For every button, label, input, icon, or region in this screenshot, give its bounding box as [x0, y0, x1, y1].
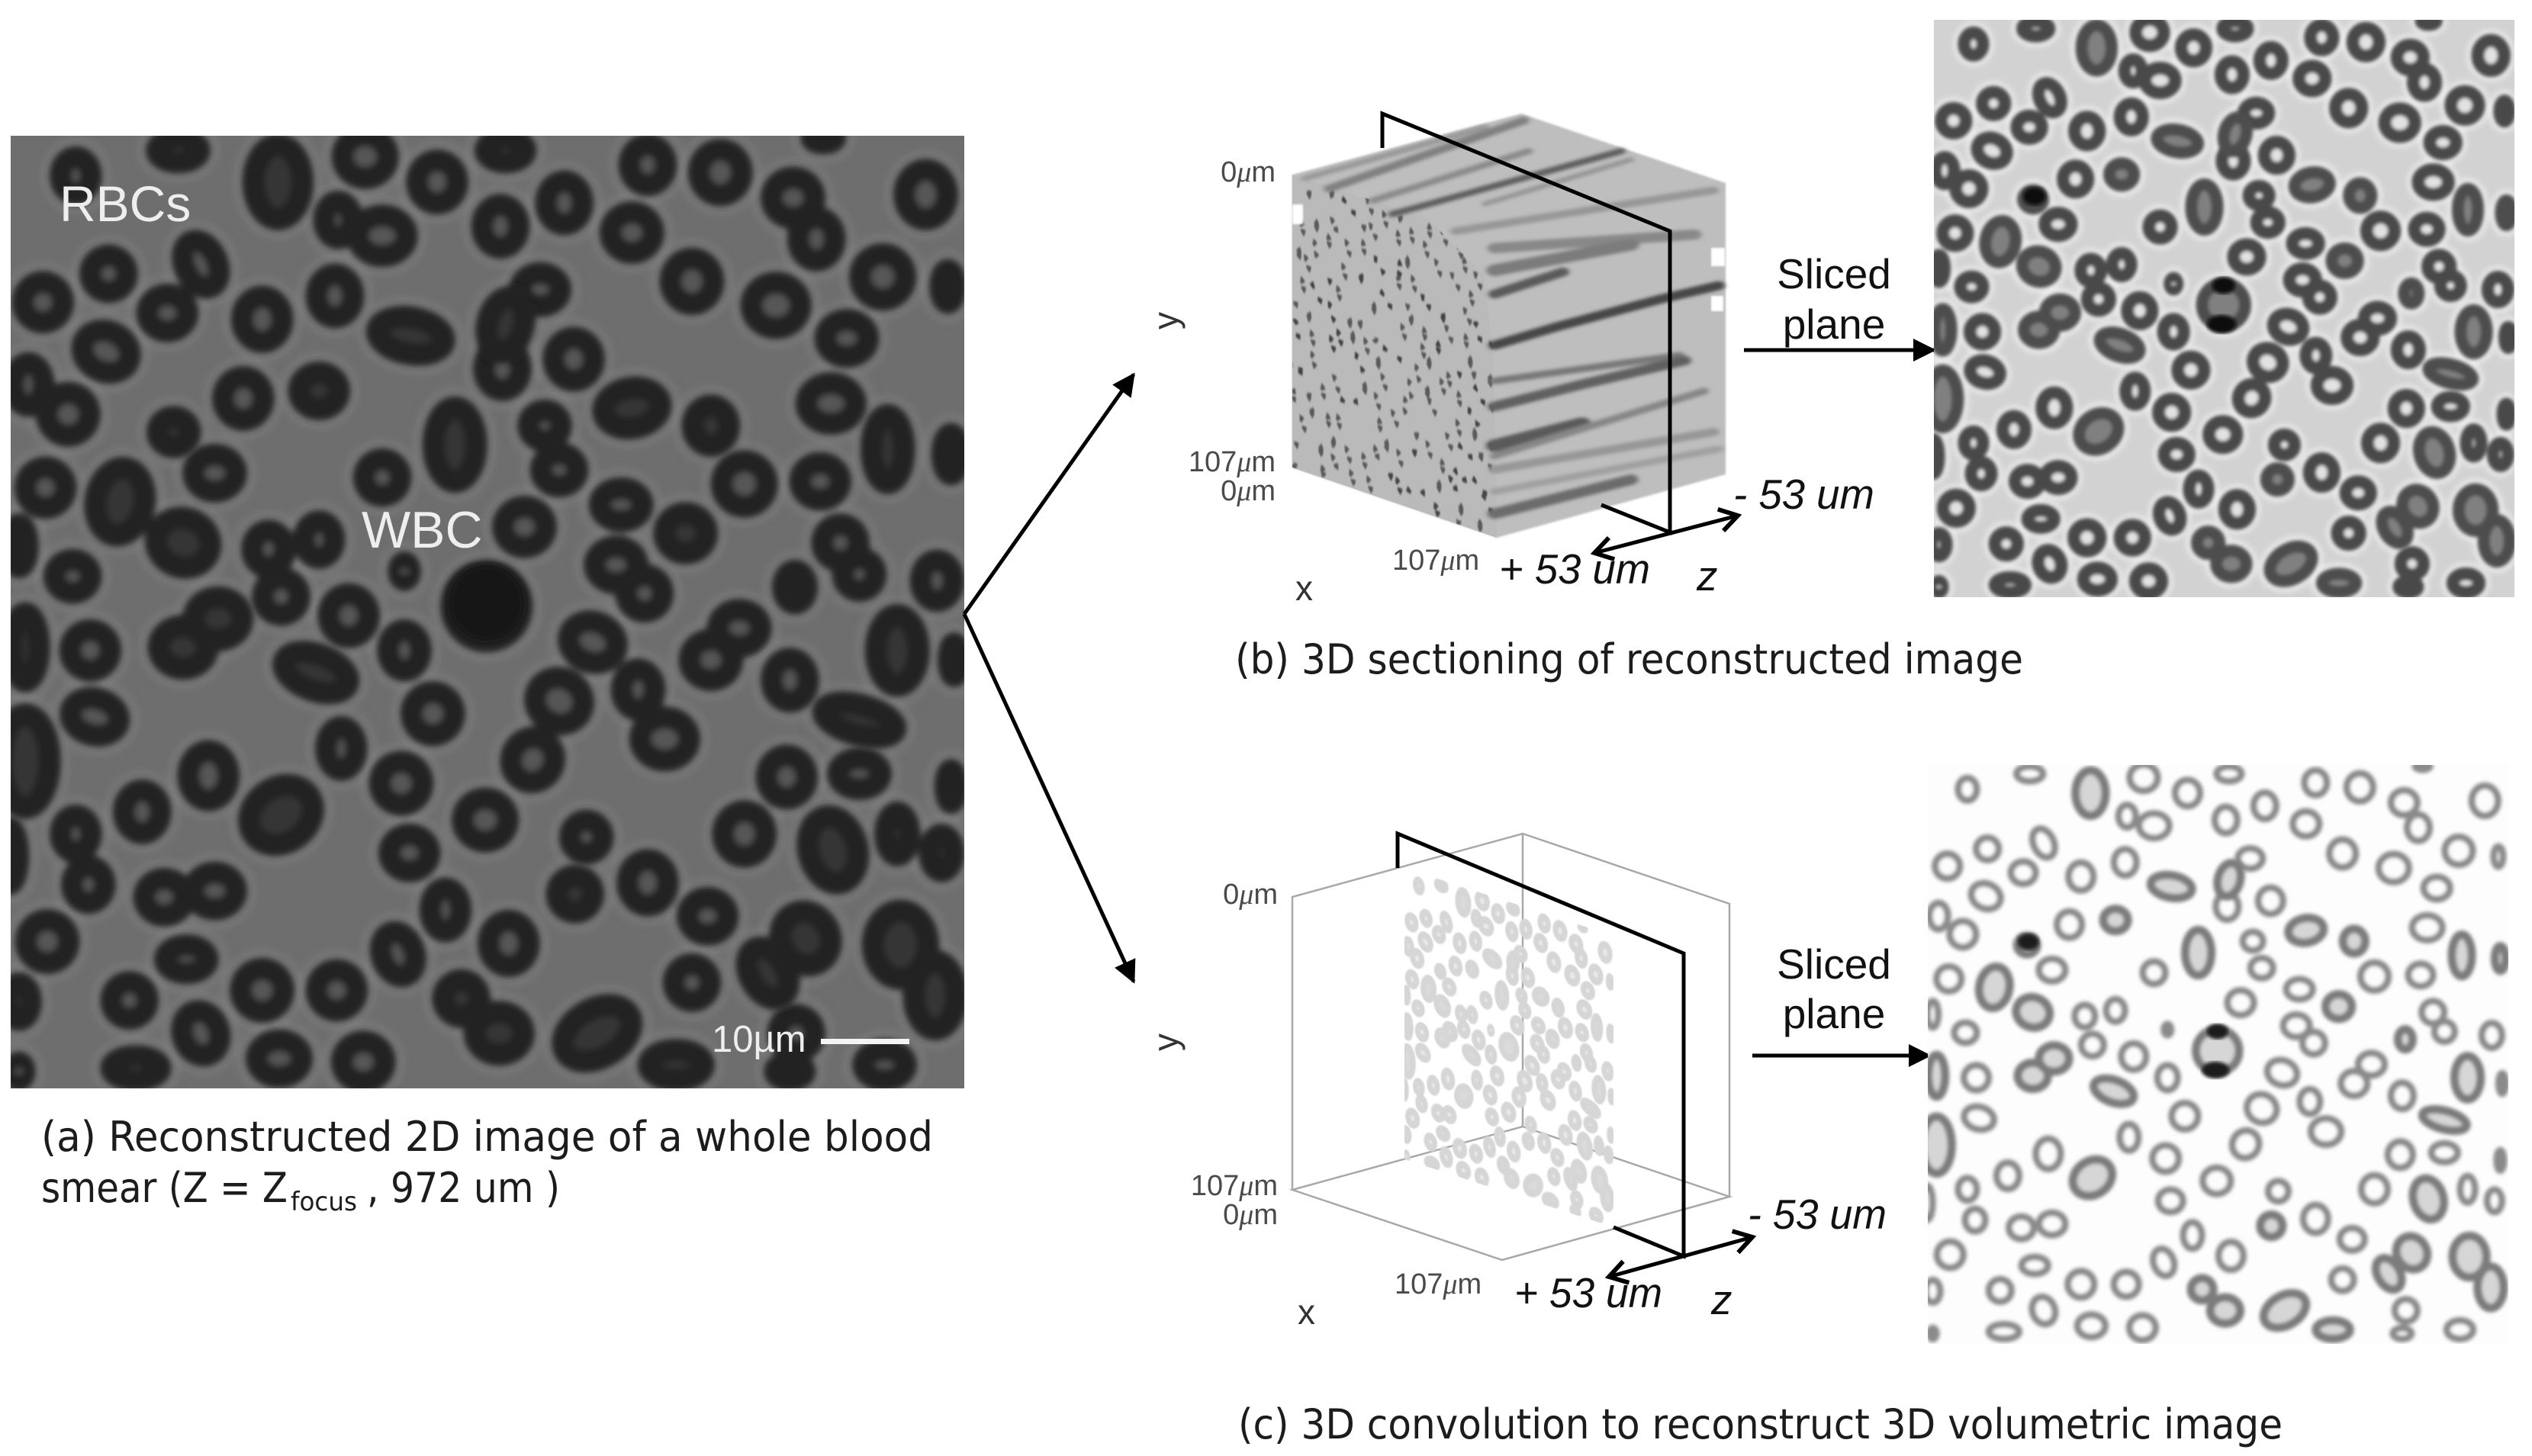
- sliced plane label c: Sliced: [1777, 940, 1891, 988]
- sliced plane label c: [1777, 940, 1891, 1037]
- distance labels: - 53 um: [1748, 1191, 1887, 1238]
- slicing plane outline: [1382, 114, 1670, 532]
- axis labels: 0μm: [1221, 156, 1276, 188]
- arrow: to panel c: [964, 614, 1134, 982]
- panel c: 3D volumetric cube: [1146, 834, 1887, 1332]
- label: RBCs: RBCs: [60, 175, 191, 232]
- axis labels: 107μm: [1395, 1268, 1482, 1300]
- caption a: smear (Z = Z: [41, 1164, 288, 1212]
- scale bar: [821, 1039, 909, 1044]
- image: sliced plane c: [1928, 765, 2508, 1344]
- panel a: reconstructed 2D image of blood smear: [1, 132, 964, 1088]
- distance labels: z: [1710, 1276, 1732, 1323]
- scale bar label: 10µm: [712, 1019, 806, 1060]
- caption a: focus: [291, 1187, 357, 1217]
- distance labels: + 53 um: [1499, 545, 1650, 593]
- sliced plane label c: plane: [1783, 990, 1885, 1037]
- axis labels: x: [1295, 568, 1313, 608]
- axis labels: y: [1146, 1033, 1186, 1051]
- axis labels: x: [1298, 1292, 1315, 1332]
- sliced plane label b: [1777, 250, 1891, 348]
- axis labels: [1146, 156, 1479, 608]
- distance labels: + 53 um: [1514, 1269, 1662, 1316]
- sliced plane label b: Sliced: [1777, 250, 1891, 297]
- caption a: [41, 1113, 933, 1217]
- z axis double arrow: [1609, 1237, 1752, 1277]
- distance labels: [1499, 471, 1874, 599]
- arrow: sliced plane b: [1744, 348, 1934, 352]
- image: sliced plane b: [1934, 20, 2514, 597]
- axis labels: y: [1146, 312, 1186, 329]
- reconstructed cell slice: [1402, 867, 1613, 1226]
- distance labels: - 53 um: [1733, 471, 1874, 518]
- caption a: (a) Reconstructed 2D image of a whole blood: [41, 1113, 933, 1161]
- axis labels: 0μm: [1223, 1199, 1278, 1231]
- axis labels: 107μm: [1392, 545, 1479, 577]
- arrow: sliced plane c: [1752, 1054, 1929, 1057]
- slicing plane outline: [1398, 834, 1684, 1256]
- axis labels: 107μm: [1191, 1170, 1278, 1202]
- label: WBC: WBC: [362, 501, 483, 559]
- caption b: (b) 3D sectioning of reconstructed image: [1235, 635, 2023, 683]
- caption c: (c) 3D convolution to reconstruct 3D volumetric image: [1238, 1400, 2283, 1448]
- panel b: 3D sectioned cube: [1146, 114, 1874, 608]
- axis labels: 0μm: [1221, 475, 1276, 507]
- distance labels: [1514, 1191, 1887, 1323]
- sliced plane label b: plane: [1783, 301, 1885, 348]
- cube wireframe: [1292, 834, 1729, 1260]
- cube faces: [1290, 114, 1726, 538]
- z axis double arrow: [1594, 516, 1738, 553]
- axis labels: [1146, 879, 1482, 1332]
- caption a: , 972 um ): [367, 1164, 560, 1212]
- distance labels: z: [1696, 552, 1718, 599]
- axis labels: 107μm: [1189, 446, 1276, 478]
- arrow: to panel b: [964, 374, 1134, 614]
- cube stripes: [1305, 121, 1719, 514]
- axis labels: 0μm: [1223, 879, 1278, 911]
